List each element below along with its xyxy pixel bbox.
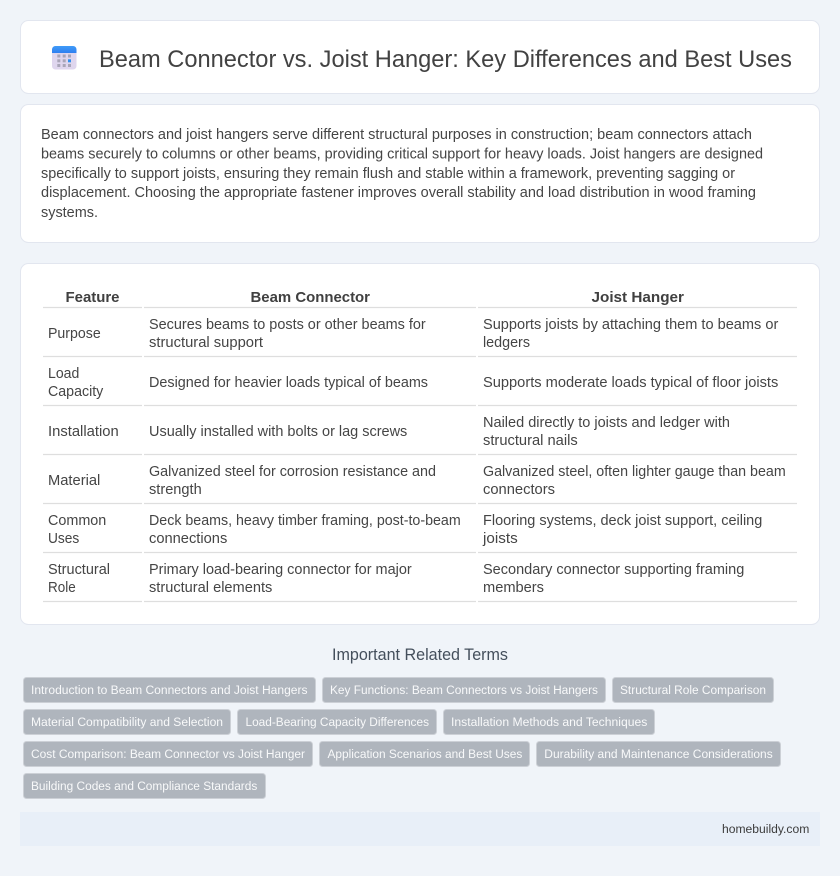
table row: material: Galvanized steel, often lighter gauge than beam — [483, 464, 786, 480]
section: related terms — [24, 646, 780, 798]
text block: introduction paragraph — [41, 127, 763, 221]
panel: introduction — [20, 104, 820, 242]
tag list: Installation Methods and Techniques — [451, 715, 647, 729]
table row: load capacity: Designed for heavier loads typical of beams — [149, 375, 428, 391]
text block: introduction paragraph: specifically to support joists, ensuring they remain flush and stable within a framework, preventing sagging or — [41, 166, 735, 182]
table row: purpose: Secures beams to posts or other beams for — [149, 317, 426, 333]
table row: material: Galvanized steel for corrosion resistance and — [149, 464, 436, 480]
footer source text: homebuildy.com — [722, 822, 809, 836]
tag list: Introduction to Beam Connectors and Joist Hangers — [31, 683, 308, 697]
tag list: Load-Bearing Capacity Differences — [246, 715, 429, 729]
table row: common uses: Uses — [48, 531, 79, 547]
table row: purpose: Supports joists by attaching them to beams or — [483, 317, 778, 333]
table row: installation: Usually installed with bolts or lag screws — [149, 424, 407, 440]
table row: material: connectors — [483, 482, 555, 498]
table row: structural role: Role — [48, 580, 76, 596]
heading: related terms: Important Related Terms — [332, 646, 508, 664]
table row: material: strength — [149, 482, 202, 498]
table row: material — [48, 464, 786, 498]
table row: common uses — [48, 513, 762, 547]
table header row — [66, 290, 684, 306]
title: Beam Connector vs. Joist Hanger: Key Differences and Best Uses — [99, 46, 792, 73]
tag list: Key Functions: Beam Connectors vs Joist Hangers — [330, 683, 598, 697]
table row: installation: structural nails — [483, 433, 578, 449]
table row: structural role: Secondary connector supporting framing — [483, 562, 744, 578]
table row: common uses: connections — [149, 531, 227, 547]
panel: title header — [20, 20, 820, 94]
table header row: Feature — [66, 290, 120, 306]
table row: material: Material — [48, 473, 100, 489]
text block: introduction paragraph: displacement. Choosing the appropriate fastener improves overall stability and load distribution in wood framing — [41, 185, 756, 201]
panel: comparison table — [20, 264, 820, 624]
table header row: Joist Hanger — [592, 290, 684, 306]
table row: structural role: members — [483, 580, 544, 596]
tag list — [24, 678, 780, 798]
table row: installation: Nailed directly to joists and ledger with — [483, 415, 730, 431]
table row: installation — [48, 415, 730, 449]
table row: purpose — [48, 317, 778, 351]
table header row: Beam Connector — [250, 290, 370, 306]
table row: common uses: Flooring systems, deck joist support, ceiling — [483, 513, 762, 529]
tag list: Building Codes and Compliance Standards — [31, 779, 257, 793]
table row: structural role: structural elements — [149, 580, 272, 596]
tag list: Material Compatibility and Selection — [31, 715, 223, 729]
icon: calendar — [52, 46, 76, 70]
tag list: Application Scenarios and Best Uses — [328, 747, 522, 761]
text block: introduction paragraph: Beam connectors and joist hangers serve different structural purposes in construction; beam connectors attach — [41, 127, 752, 143]
tag list: Cost Comparison: Beam Connector vs Joist Hanger — [31, 747, 305, 761]
table row: purpose: structural support — [149, 335, 263, 351]
table row: structural role: Primary load-bearing connector for major — [149, 562, 412, 578]
table row: purpose: Purpose — [48, 326, 101, 342]
table row: installation: Installation — [48, 424, 119, 440]
table row: common uses: Common — [48, 513, 106, 529]
table row: common uses: joists — [482, 531, 518, 547]
table row: structural role: Structural — [48, 562, 110, 578]
table row: load capacity — [48, 366, 778, 400]
table row: common uses: Deck beams, heavy timber framing, post-to-beam — [149, 513, 461, 529]
table row: load capacity: Supports moderate loads typical of floor joists — [483, 375, 778, 391]
table row: load capacity: Load — [48, 366, 79, 382]
table row: structural role — [48, 562, 744, 596]
table row: purpose: ledgers — [483, 335, 530, 351]
text block: introduction paragraph: systems. — [41, 205, 98, 221]
text block: introduction paragraph: beams securely to columns or other beams, providing critical support for heavy loads. Joist hangers are designed — [41, 146, 763, 162]
tag list: Durability and Maintenance Considerations — [544, 747, 773, 761]
footer bar — [20, 812, 820, 846]
tag list: Structural Role Comparison — [620, 683, 766, 697]
table row: load capacity: Capacity — [48, 384, 104, 400]
